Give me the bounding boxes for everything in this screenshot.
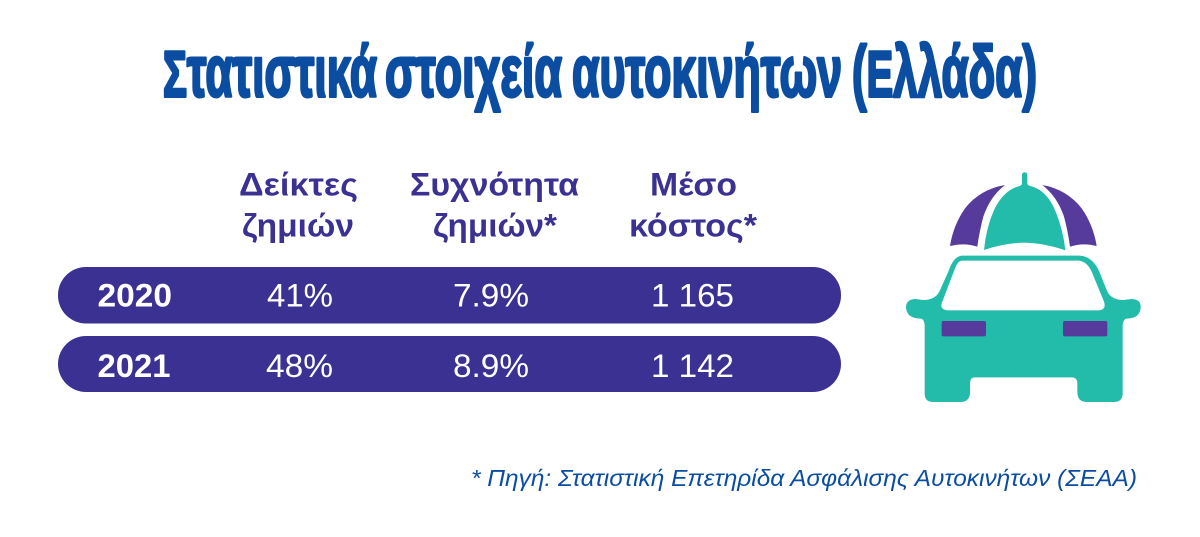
column header: loss ratio bbox=[239, 166, 358, 244]
column header: claim frequency: ζημιών* bbox=[433, 208, 558, 244]
column header: claim frequency: Συχνότητα bbox=[410, 166, 579, 202]
row 2020 bbox=[58, 267, 841, 324]
column header: average cost bbox=[629, 166, 758, 244]
title: Στατιστικά bbox=[163, 32, 377, 112]
row 2020: 41% bbox=[267, 278, 333, 314]
column header: average cost: Μέσο bbox=[650, 166, 737, 202]
column header: claim frequency bbox=[410, 166, 579, 244]
title: (Ελλάδα) bbox=[852, 32, 1037, 112]
icon: left headlight bbox=[942, 321, 986, 336]
icon: umbrella bbox=[950, 172, 1097, 250]
row 2020: 1 165 bbox=[651, 278, 734, 314]
row 2021: 1 142 bbox=[651, 348, 734, 384]
icon: right headlight bbox=[1063, 321, 1107, 336]
icon: car under umbrella bbox=[906, 172, 1141, 402]
row 2021: 8.9% bbox=[453, 348, 529, 384]
table bbox=[58, 166, 841, 392]
icon: car body bbox=[906, 256, 1141, 402]
icon: windshield bbox=[941, 261, 1105, 310]
column header: loss ratio: Δείκτες bbox=[239, 166, 358, 202]
title: αυτοκινήτων bbox=[572, 32, 842, 112]
column header: loss ratio: ζημιών bbox=[242, 208, 354, 244]
title: στοιχεία bbox=[385, 32, 562, 112]
row 2020: 7.9% bbox=[453, 278, 529, 314]
column header: average cost: κόστος* bbox=[629, 208, 758, 244]
title bbox=[163, 32, 1037, 112]
row 2021: 48% bbox=[266, 348, 333, 384]
row 2020: 2020 bbox=[98, 278, 172, 314]
row 2021 bbox=[58, 336, 841, 392]
source note: * Πηγή: Στατιστική Επετηρίδα Ασφάλισης Αυτοκινήτων (ΣΕΑΑ) bbox=[471, 465, 1137, 491]
row 2021: 2021 bbox=[98, 348, 170, 384]
